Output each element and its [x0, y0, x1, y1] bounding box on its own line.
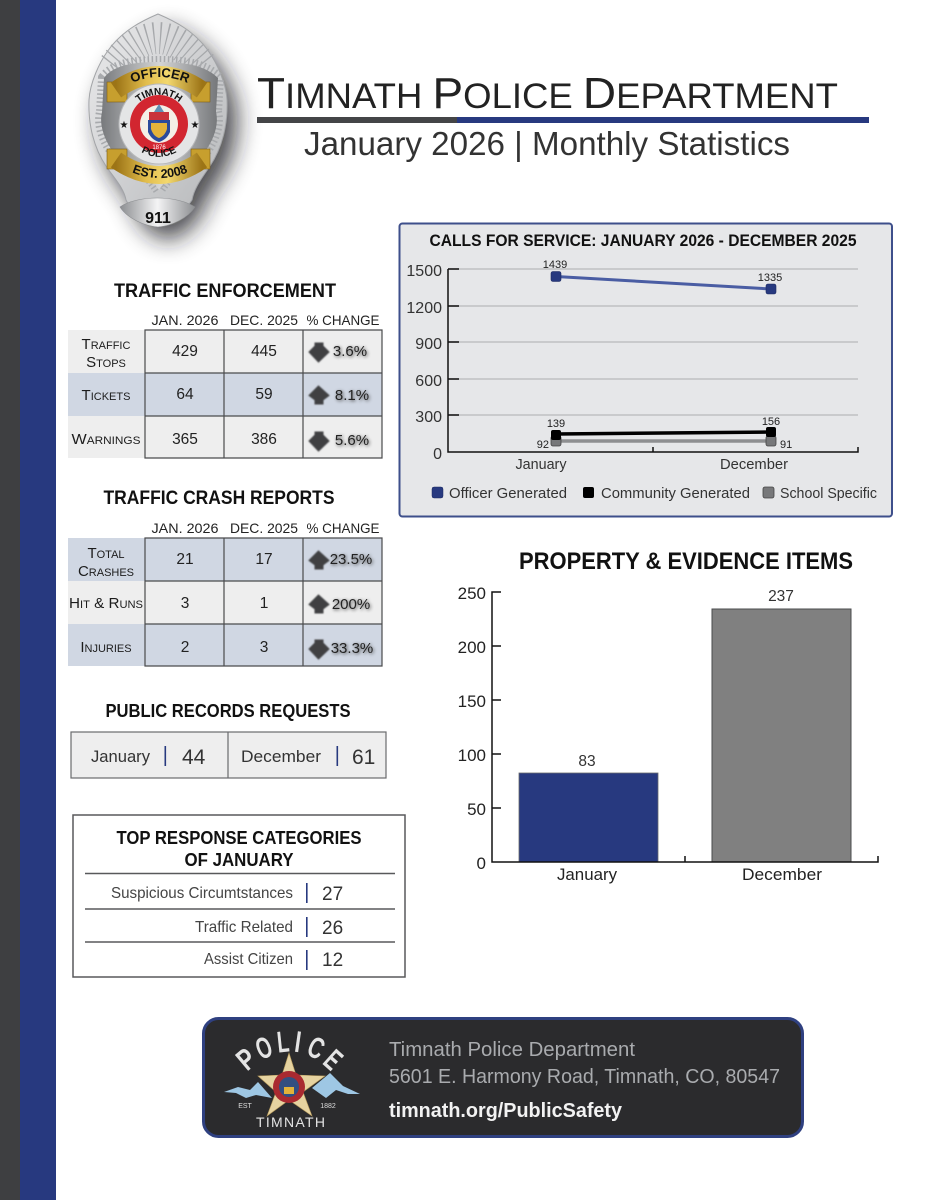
- chart y axis labels: [406, 263, 442, 463]
- series: school specific: 91: [780, 439, 792, 451]
- footer contact text: 5601 E. Harmony Road, Timnath, CO, 80547: [389, 1066, 780, 1088]
- chart y axis labels: 600: [415, 373, 442, 390]
- table: traffic enforcement data: Tickets: [82, 387, 130, 404]
- category: suspicious circumstances: 27: [322, 884, 343, 905]
- table: crash data: 1: [260, 595, 268, 612]
- category: traffic related: Traffic Related: [195, 919, 293, 936]
- chart x axis labels: [516, 457, 788, 473]
- bar chart x axis labels: December: [742, 865, 822, 884]
- table: crash data: Hit & Runs: [69, 595, 143, 612]
- icon: police star logo: [224, 1025, 360, 1130]
- chart gridlines and axes: [448, 269, 858, 452]
- table: crash data: Injuries: [80, 639, 132, 656]
- category: traffic related: [195, 917, 343, 939]
- table column headers: [152, 312, 380, 328]
- series: community generated: [547, 416, 780, 440]
- chart legend: Community Generated: [601, 485, 750, 502]
- panel: property and evidence bar chart: [458, 548, 878, 884]
- chart legend: [432, 485, 877, 502]
- badge seal: [118, 84, 200, 164]
- change: down 33.3%: [309, 640, 373, 659]
- bar chart axes: [492, 592, 878, 862]
- table: crash data: 17: [255, 551, 273, 568]
- table: traffic enforcement data: 64: [176, 386, 194, 403]
- table column headers: JAN. 2026: [152, 312, 219, 328]
- category: traffic related: 26: [322, 918, 343, 939]
- icon: police star logo: P: [230, 1042, 263, 1077]
- table: traffic enforcement data: Warnings: [72, 431, 140, 448]
- title underline: [257, 117, 869, 123]
- heading: public records requests: PUBLIC RECORDS REQUESTS: [106, 700, 350, 721]
- panel: public records requests: [71, 700, 386, 778]
- table: crash data: 3: [260, 639, 268, 656]
- records values box: 61: [352, 746, 375, 769]
- table column headers: % CHANGE: [306, 312, 380, 328]
- bar chart y axis labels: 150: [458, 692, 486, 711]
- table: traffic enforcement data: 59: [255, 386, 273, 403]
- change: up 8.1%: [309, 386, 369, 404]
- change: down 5.6%: [309, 432, 369, 451]
- icon: police star logo: O: [251, 1030, 277, 1067]
- bar: december: 237: [768, 588, 794, 605]
- category: assist citizen: [204, 950, 343, 971]
- table: traffic enforcement data: [68, 330, 382, 458]
- table: traffic enforcement data: 429: [172, 343, 198, 360]
- bar: december: [712, 588, 851, 862]
- badge ribbon: officer: [106, 66, 210, 102]
- footer contact text: Timnath Police Department: [389, 1039, 635, 1061]
- chart y axis labels: 1500: [406, 263, 442, 280]
- change: down 3.6%: [309, 343, 367, 362]
- icon: police star logo: EST: [238, 1103, 253, 1110]
- change: up 23.5%: 23.5%: [330, 551, 372, 568]
- bar chart y axis labels: 100: [458, 746, 486, 765]
- table: crash data: Total: [87, 545, 125, 562]
- chart legend: School Specific: [780, 485, 877, 502]
- panel: top response categories: [73, 815, 405, 977]
- icon: police star logo: L: [275, 1025, 291, 1060]
- change: down 33.3%: 33.3%: [331, 640, 373, 657]
- table: crash data: 21: [176, 551, 194, 568]
- bar chart y axis labels: 200: [458, 638, 486, 657]
- chart y axis labels: 1200: [406, 300, 442, 317]
- table column headers: DEC. 2025: [230, 312, 298, 328]
- heading: top response categories: TOP RESPONSE CATEGORIES: [116, 827, 362, 848]
- panel: traffic enforcement: [68, 280, 382, 458]
- series: officer generated: [543, 259, 782, 294]
- panel: calls for service line chart: [400, 224, 892, 516]
- table: traffic enforcement data: 386: [251, 431, 277, 448]
- heading: traffic crash reports: TRAFFIC CRASH REPORTS: [104, 487, 334, 509]
- table: traffic enforcement data: Traffic: [82, 336, 130, 353]
- badge seal: ★: [120, 120, 129, 131]
- badge seal: ★: [191, 120, 200, 131]
- table: traffic enforcement data: Stops: [86, 354, 126, 371]
- change: up 200%: [309, 595, 370, 613]
- crash table column headers: [152, 520, 380, 536]
- badge seal: POLICE: [142, 146, 176, 157]
- chart y axis labels: 900: [415, 336, 442, 353]
- series: school specific: [537, 436, 792, 451]
- heading: traffic enforcement: TRAFFIC ENFORCEMENT: [114, 280, 336, 302]
- table: traffic enforcement data: 365: [172, 431, 198, 448]
- icon: police star logo: 1882: [320, 1103, 336, 1110]
- records values box: [71, 732, 386, 778]
- chart x axis labels: December: [720, 457, 788, 473]
- change: down 3.6%: 3.6%: [333, 343, 367, 360]
- category: suspicious circumstances: [111, 883, 343, 905]
- chart y axis labels: 300: [415, 409, 442, 426]
- heading: top response categories: OF JANUARY: [184, 849, 294, 870]
- icon: police star logo: TIMNATH: [256, 1114, 325, 1130]
- bar chart y axis labels: 0: [477, 854, 486, 873]
- change: down 5.6%: 5.6%: [335, 432, 369, 449]
- category: assist citizen: 12: [322, 950, 343, 971]
- panel: footer contact: [204, 1018, 802, 1136]
- footer contact text: timnath.org/PublicSafety: [389, 1100, 623, 1122]
- bar: january: 83: [578, 753, 596, 770]
- table: crash data: 3: [181, 595, 189, 612]
- bar chart heading: PROPERTY & EVIDENCE ITEMS: [519, 548, 853, 575]
- chart heading: CALLS FOR SERVICE: JANUARY 2026 - DECEMBER 2025: [430, 232, 856, 250]
- bar: january: [519, 753, 658, 862]
- crash table column headers: JAN. 2026: [152, 520, 219, 536]
- table: crash data: [68, 538, 382, 666]
- bar chart x axis labels: January: [557, 865, 617, 884]
- left sidebar stripes: [0, 0, 56, 1200]
- table: traffic enforcement data: 445: [251, 343, 277, 360]
- series: community generated: 156: [762, 416, 780, 428]
- badge tab: 911: 911: [145, 210, 171, 227]
- crash table column headers: DEC. 2025: [230, 520, 298, 536]
- badge tab: 911: [120, 198, 195, 227]
- title: TIMNATH POLICE DEPARTMENT: [257, 69, 838, 118]
- table: crash data: Crashes: [78, 563, 134, 580]
- change: up 200%: 200%: [332, 596, 370, 613]
- footer contact text: [389, 1039, 780, 1122]
- badge ribbon: officer: OFFICER: [130, 68, 190, 83]
- icon: police star logo: C: [302, 1030, 329, 1067]
- chart x axis labels: January: [516, 457, 567, 473]
- heading: top response categories: [116, 827, 362, 870]
- series: community generated: 139: [547, 418, 565, 430]
- bar chart y axis labels: [458, 584, 486, 873]
- badge seal: TIMNATH: [134, 88, 183, 102]
- category: suspicious circumstances: Suspicious Circumtstances: [111, 885, 293, 902]
- table: crash data: 2: [181, 639, 189, 656]
- chart legend: Officer Generated: [449, 485, 567, 502]
- icon: police star logo: E: [317, 1044, 349, 1077]
- badge ribbon: established: EST. 2008: [132, 164, 187, 178]
- series: school specific: 92: [537, 439, 549, 451]
- bar chart y axis labels: 250: [458, 584, 486, 603]
- records values box: December: [241, 747, 321, 766]
- records values box: January: [91, 747, 150, 766]
- category: assist citizen: Assist Citizen: [204, 951, 293, 968]
- change: up 8.1%: 8.1%: [335, 387, 369, 404]
- badge seal: 1876: [152, 145, 166, 151]
- icon: officer badge: [80, 12, 256, 256]
- series: officer generated: 1335: [758, 272, 782, 284]
- crash table column headers: % CHANGE: [306, 520, 380, 536]
- records values box: 44: [182, 746, 206, 769]
- bar chart x axis labels: [557, 865, 822, 884]
- chart y axis labels: 0: [433, 446, 442, 463]
- subtitle: January 2026 | Monthly Statistics: [304, 125, 790, 162]
- badge ribbon: established: [106, 148, 210, 184]
- panel: traffic crash reports: [68, 487, 382, 666]
- icon: police star logo: I: [293, 1026, 303, 1059]
- change: up 23.5%: [309, 551, 372, 569]
- bar chart y axis labels: 50: [467, 800, 486, 819]
- series: officer generated: 1439: [543, 259, 567, 271]
